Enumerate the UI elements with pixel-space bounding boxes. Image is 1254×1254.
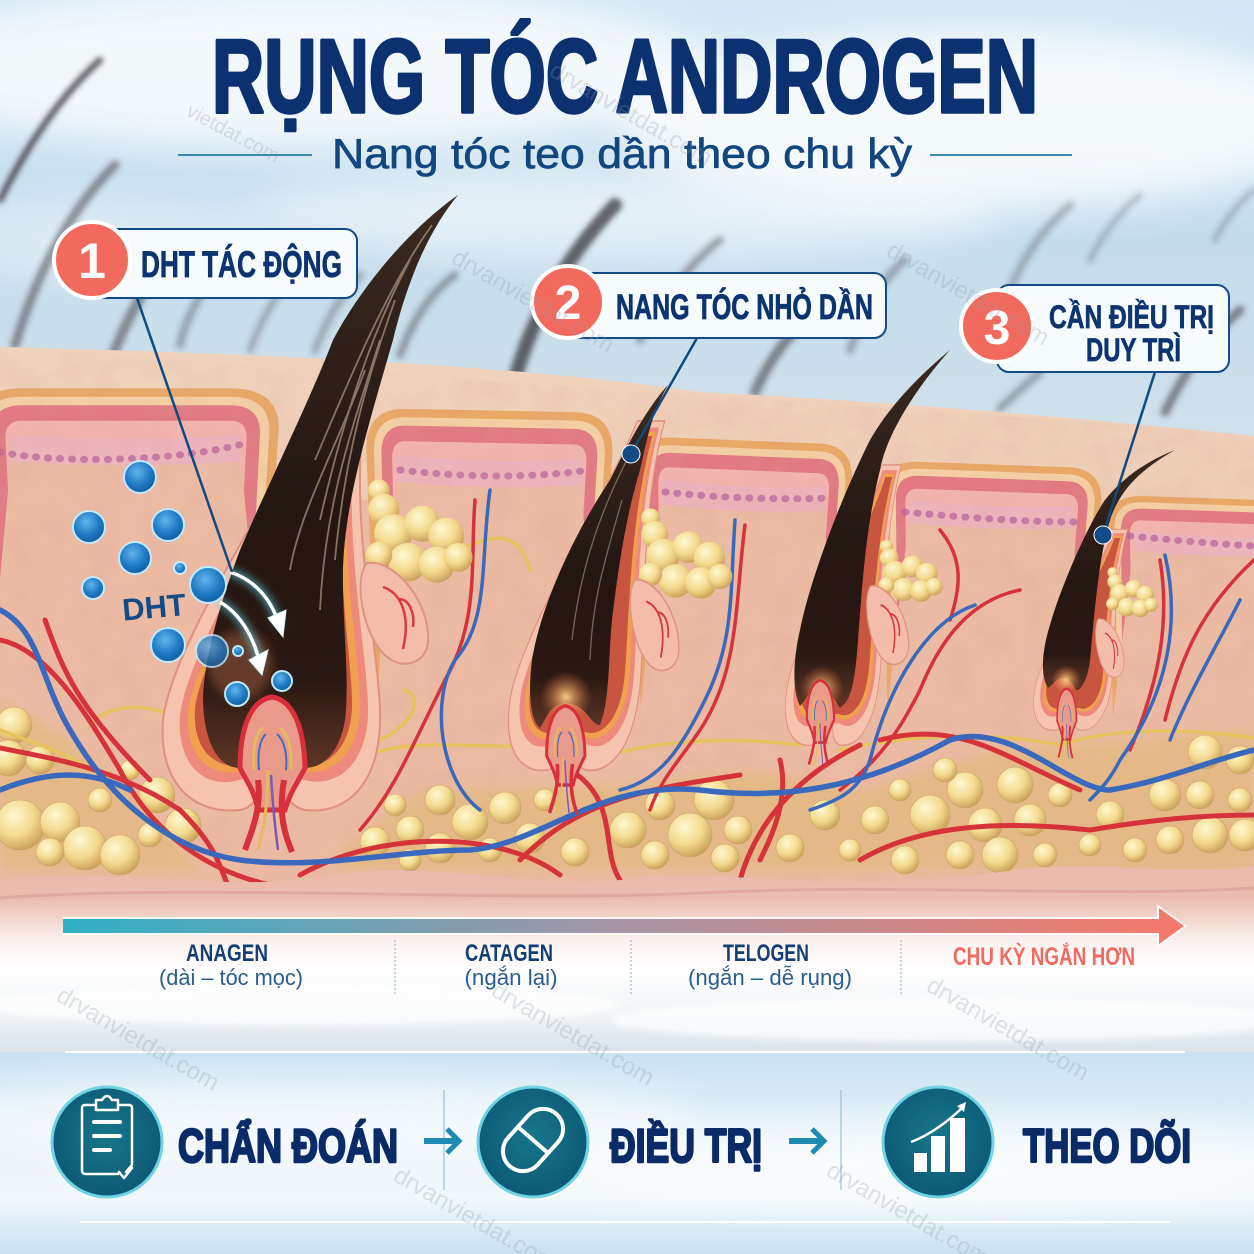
bottom panel background [0,1051,1254,1254]
shorter cycle label: CHU KỲ NGẮN HƠN [953,941,1135,971]
watermarks: vietdat.com [183,100,283,167]
phase: telogen: (ngắn – dễ rụng) [688,965,852,990]
sebaceous glands [361,479,1158,677]
icon: rising chart [883,1087,993,1197]
arrow [424,1129,459,1153]
label: THEO DÕI [1023,1119,1191,1172]
callout 3: DUY TRÌ [1086,332,1181,368]
skin texture [272,414,1190,430]
callout 3: 3 [984,302,1010,355]
phase: catagen: CATAGEN [465,940,553,967]
callout 1: 1 [78,233,106,289]
skin compartments [0,388,1254,778]
DHT arrows [220,572,286,675]
callout 1: DHT TÁC ĐỘNG [141,243,342,285]
phase: catagen: (ngắn lại) [464,965,558,990]
callout 1 [54,222,357,572]
watermarks: drvanvietdat.com [52,982,224,1097]
phase: telogen [688,940,852,990]
follicle 4 [1029,450,1175,758]
section fade to clouds [0,968,1254,1052]
subtitle: Nang tóc teo dần theo chu kỳ [332,130,912,177]
lower skin layer [0,866,1254,975]
phase: anagen: ANAGEN [186,940,268,967]
callout 2: NANG TÓC NHỎ DẦN [616,287,873,327]
follicle 1 [163,195,458,852]
callout 3 [961,285,1229,544]
background sky [0,0,1254,440]
phase: anagen: (dài – tóc mọc) [159,965,303,990]
label: CHẨN ĐOÁN [178,1119,398,1172]
watermarks: drvanvietdat.com [922,972,1094,1087]
timeline arrow [63,904,1187,948]
arrow [789,1129,824,1153]
watermarks: drvanvietdat.com [882,237,1054,352]
fat base tone [0,700,1254,870]
DHT molecules [73,461,292,706]
timeline dividers [395,940,901,996]
step: monitoring [883,1087,1191,1197]
background hairs [0,60,1254,412]
watermarks: drvanvietdat.com [447,244,619,359]
watermarks: drvanvietdat.com [545,57,717,172]
callout 2 [532,266,886,463]
phase: catagen [464,940,558,990]
follicle 3 [780,350,950,766]
icon: capsule [478,1087,588,1197]
blood vessels and nerves [0,490,1254,890]
step: treatment [478,1087,762,1197]
label: ĐIỀU TRỊ [610,1119,762,1172]
DHT label: DHT [121,587,187,628]
phase: anagen [159,940,303,990]
watermarks [52,57,1094,1254]
icon: clipboard [52,1087,162,1197]
phase: telogen: TELOGEN [723,940,809,967]
skin block [0,347,1254,900]
callout 2: 2 [555,277,581,330]
watermarks: drvanvietdat.com [487,977,659,1092]
panel dividers [444,1090,841,1190]
step: diagnosis [52,1087,398,1197]
follicle 2 [502,385,672,814]
subcutaneous fat [0,707,1254,875]
